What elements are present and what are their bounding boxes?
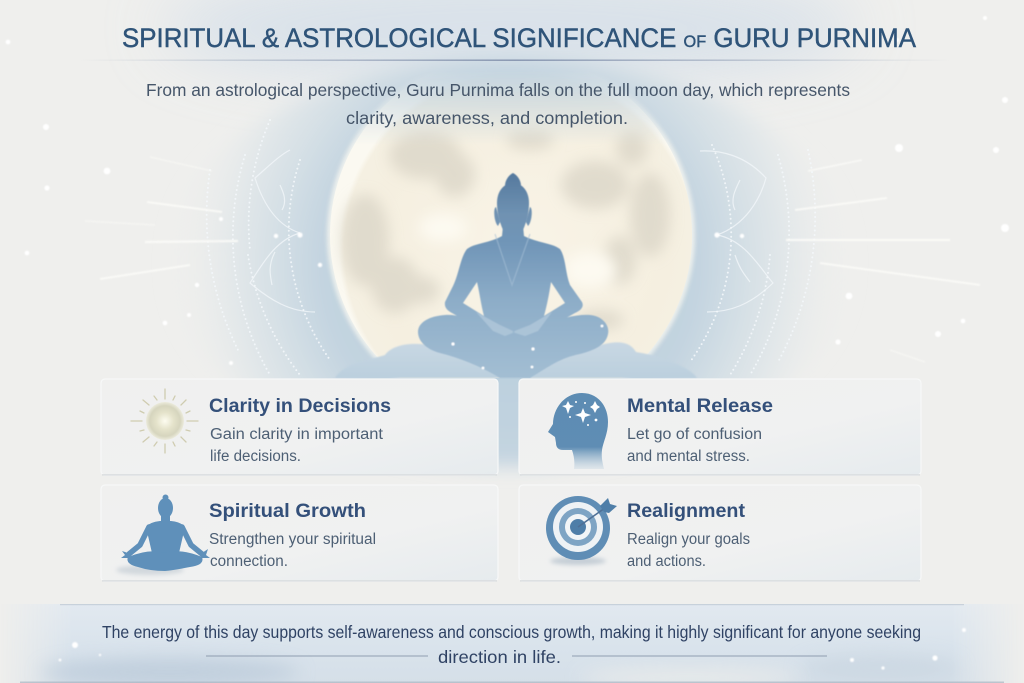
icon: sun [131,389,198,453]
card description: life decisions. [210,448,301,465]
mandala: dotted arcs and lotus petals [207,120,815,375]
icon: head with stars [548,393,608,469]
icon: target with arrow [546,496,617,565]
card description: Let go of confusion [627,426,762,443]
closing statement: direction in life. [438,647,561,667]
footer band [0,604,1024,683]
card description: connection. [210,553,288,570]
icon: meditating figure [116,494,210,575]
card description [627,426,762,465]
closing statement [102,622,921,667]
card description: Strengthen your spiritual [209,531,376,548]
intro text: clarity, awareness, and completion. [346,108,628,128]
full moon [325,82,696,378]
intro text: From an astrological perspective, Guru Purnima falls on the full moon day, which represents [146,80,850,100]
card description [210,426,384,465]
title: SPIRITUAL & ASTROLOGICAL SIGNIFICANCE OF GURU PURNIMA [122,23,916,53]
card description: and actions. [627,553,706,570]
meditating guru silhouette [418,173,608,378]
panel: clarity in decisions [101,379,498,476]
intro text [146,80,850,128]
card heading: Realignment [627,500,745,522]
card description: and mental stress. [627,448,750,465]
sparkling stars [6,16,1009,365]
light rays [85,157,980,362]
card description: Realign your goals [627,531,750,548]
panel: spiritual growth [101,485,498,582]
card heading: Spiritual Growth [209,500,366,522]
card description [627,531,750,570]
panel: realignment [519,485,921,582]
card heading: Clarity in Decisions [209,395,391,417]
panel: mental release [519,379,921,476]
closing statement: The energy of this day supports self-awareness and conscious growth, making it highly significant for anyone seeking [102,622,921,642]
rocks under the seated figure [335,342,697,378]
card description: Gain clarity in important [210,426,384,443]
card heading: Mental Release [627,395,773,417]
card description [209,531,376,570]
